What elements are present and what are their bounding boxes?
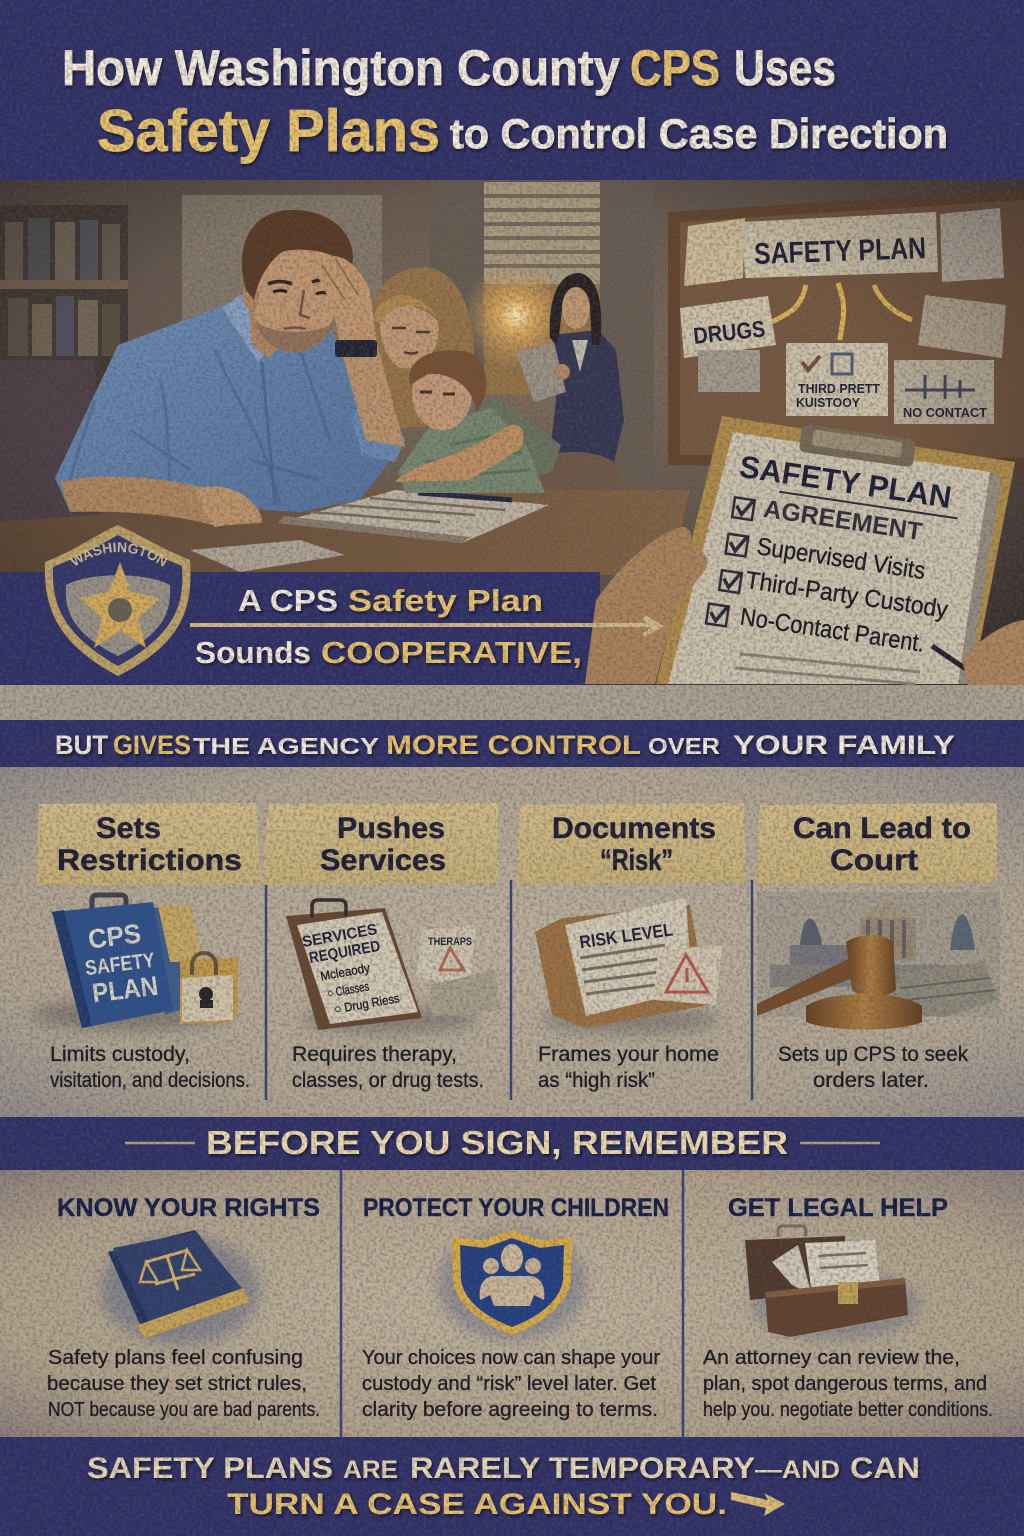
icon: services required clipboard: THERAPS <box>428 936 472 948</box>
text: limits custody: visitation, and decisions. <box>50 1069 250 1092</box>
icon: courthouse and gavel <box>757 892 1000 1030</box>
heading: know your rights: KNOW YOUR RIGHTS <box>57 1194 320 1222</box>
heading: protect your children: PROTECT YOUR CHILDREN <box>363 1194 669 1222</box>
text: frames your home <box>538 1043 719 1092</box>
text: safety plans feel confusing: because they set strict rules, <box>47 1372 307 1395</box>
text: frames your home: Frames your home <box>538 1043 719 1066</box>
panel: stone band <box>0 685 1024 720</box>
icon: safety plan clipboard: AGREEMENT <box>762 495 924 546</box>
banner: but gives the agency: YOUR FAMILY <box>733 730 955 760</box>
label: sets restrictions: Restrictions <box>57 844 242 877</box>
panel: footer warning: ARE <box>343 1456 398 1484</box>
icon: services required clipboard: ○ Classes <box>326 979 370 1000</box>
icon: services required clipboard: Mcleaody <box>319 961 372 983</box>
icon: window blinds <box>430 180 654 480</box>
text: sets up cps <box>778 1043 968 1092</box>
icon: no contact note <box>894 360 994 424</box>
label: documents risk: “Risk” <box>600 844 673 877</box>
column: get legal help <box>703 1194 993 1421</box>
icon: cps safety plan binder: SAFETY <box>84 949 156 980</box>
column: pushes services <box>262 803 500 1092</box>
arrow <box>190 617 660 635</box>
icon: safety plan clipboard <box>656 416 1015 684</box>
icon: third party custody note <box>786 343 888 416</box>
icon: left sticky note <box>684 218 745 286</box>
text: safety plans feel confusing <box>47 1346 320 1421</box>
icon: services required clipboard <box>286 900 500 1034</box>
label: pushes services: Pushes <box>337 812 445 845</box>
banner: but gives the agency: MORE CONTROL <box>386 730 641 760</box>
icon: bookshelf <box>0 205 128 505</box>
column: protect your children <box>362 1194 669 1421</box>
column: can lead to court <box>757 803 1000 1092</box>
panel: caption banner <box>0 572 600 685</box>
icon: washington badge <box>44 525 190 676</box>
icon: services required clipboard: REQUIRED <box>308 938 382 967</box>
caption text: Safety Plan <box>348 583 543 618</box>
icon: no contact note: NO CONTACT <box>903 406 987 420</box>
text: sets up cps: orders later. <box>813 1069 929 1092</box>
banner: but gives the agency: OVER <box>648 733 720 759</box>
arrow <box>731 1492 785 1516</box>
icon: document briefcase <box>745 1226 920 1340</box>
icon: cps safety plan binder <box>30 895 238 1031</box>
label: pushes services: Services <box>320 844 446 877</box>
caption text <box>195 583 582 670</box>
icon: safety plan clipboard: SAFETY PLAN <box>737 449 954 515</box>
panel: footer warning <box>0 1437 1024 1536</box>
text: your choices <box>362 1346 660 1421</box>
icon: safety plan clipboard: Third-Party Custody <box>744 567 950 624</box>
banner: but gives the agency <box>0 720 1024 767</box>
label: sets restrictions: Sets <box>96 812 161 845</box>
label: can lead to court: Can Lead to <box>793 812 971 845</box>
text: frames your home: as “high risk” <box>538 1069 655 1092</box>
icon: washington badge: WASHINGTON <box>69 542 168 567</box>
text: sets up cps: Sets up CPS to seek <box>778 1043 968 1066</box>
icon: risk level folder <box>535 898 722 1034</box>
title: Safety Plans <box>97 98 440 164</box>
icon: corkboard <box>668 190 1024 470</box>
title: How Washington County <box>62 40 620 96</box>
panel: hero illustration <box>0 180 1024 685</box>
banner: before you sign <box>0 1117 1024 1170</box>
text: an attorney: plan, spot dangerous terms, and <box>703 1372 987 1395</box>
banner: before you sign: BEFORE YOU SIGN, REMEMBER <box>206 1124 788 1161</box>
icon: sofa <box>0 360 100 520</box>
icon: table with papers <box>0 490 690 575</box>
icon: law book <box>100 1230 260 1345</box>
label: can lead to court: Court <box>830 844 918 877</box>
label: documents risk <box>517 803 745 884</box>
icon: cps safety plan binder: PLAN <box>91 971 160 1008</box>
text: limits custody: Limits custody, <box>50 1043 190 1066</box>
banner: but gives the agency: BUT <box>55 730 108 760</box>
icon: services required clipboard: ○ Drug Riess <box>333 991 401 1016</box>
panel: footer warning: RARELY TEMPORARY <box>410 1452 755 1485</box>
label: pushes services <box>262 803 498 885</box>
icon: safety plan clipboard: No-Contact Parent. <box>738 604 926 658</box>
panel: footer warning: SAFETY PLANS <box>87 1452 333 1485</box>
icon: drugs note: DRUGS <box>692 315 766 349</box>
icon: wall poster <box>182 195 382 365</box>
icon: father <box>55 210 405 527</box>
icon: third party custody note: THIRD PRETT <box>798 382 880 396</box>
icon: safety plan clipboard: Supervised Visits <box>755 533 927 585</box>
caption text: A CPS <box>238 583 338 618</box>
text: requires therapy: Requires therapy, <box>292 1043 457 1066</box>
text: requires therapy <box>292 1043 484 1092</box>
title: CPS <box>630 40 720 96</box>
icon: risk level folder: RISK LEVEL <box>578 919 674 952</box>
text: safety plans feel confusing: Safety plans feel confusing <box>48 1346 303 1369</box>
icon: safety plan note <box>742 212 938 278</box>
icon: safety plan note: SAFETY PLAN <box>754 232 927 271</box>
icon: caseworker in background <box>516 273 624 470</box>
label: documents risk: Documents <box>552 812 716 845</box>
title: Uses <box>734 40 836 96</box>
text: your choices: Your choices now can shape your <box>362 1346 660 1369</box>
icon: clipboard holding hand <box>585 527 707 684</box>
icon: mother <box>367 267 561 492</box>
icon: cps safety plan binder: CPS <box>86 918 143 955</box>
title: to Control Case Direction <box>450 110 948 157</box>
panel: footer warning: TURN A CASE AGAINST YOU. <box>227 1488 727 1521</box>
icon: child <box>395 350 545 493</box>
title <box>62 40 948 164</box>
icon: hand with pen <box>932 620 1024 685</box>
column: know your rights <box>47 1194 320 1421</box>
column: documents risk <box>517 803 745 1092</box>
text: an attorney: An attorney can review the, <box>703 1346 960 1369</box>
banner: but gives the agency: THE AGENCY <box>193 733 379 759</box>
icon: hero vignette <box>0 180 1024 685</box>
label: sets restrictions <box>37 803 261 885</box>
text: an attorney <box>703 1346 993 1421</box>
text: your choices: custody and “risk” level later. Get <box>362 1372 656 1395</box>
icon: drugs note <box>680 296 776 358</box>
panel: footer warning: —AND <box>755 1456 840 1484</box>
column: sets restrictions <box>30 803 261 1092</box>
label: can lead to court <box>757 803 997 884</box>
icon: third party custody note: KUISTOOY <box>796 396 861 410</box>
panel: remember columns <box>0 1170 1024 1437</box>
text: your choices: clarity before agreeing to terms. <box>362 1398 658 1421</box>
icon: lamp glow <box>461 261 571 371</box>
text: limits custody <box>50 1043 250 1092</box>
banner: but gives the agency: GIVES <box>113 730 191 760</box>
caption text: COOPERATIVE, <box>321 635 582 670</box>
text: safety plans feel confusing: NOT because you are bad parents. <box>48 1398 320 1421</box>
icon: services required clipboard: SERVICES <box>301 921 379 951</box>
caption text: Sounds <box>195 635 311 670</box>
heading: get legal help: GET LEGAL HELP <box>728 1194 948 1222</box>
panel: footer warning: CAN <box>850 1452 920 1485</box>
panel: four effects <box>0 767 1024 1117</box>
icon: family shield <box>437 1230 587 1340</box>
text: requires therapy: classes, or drug tests. <box>292 1069 484 1092</box>
